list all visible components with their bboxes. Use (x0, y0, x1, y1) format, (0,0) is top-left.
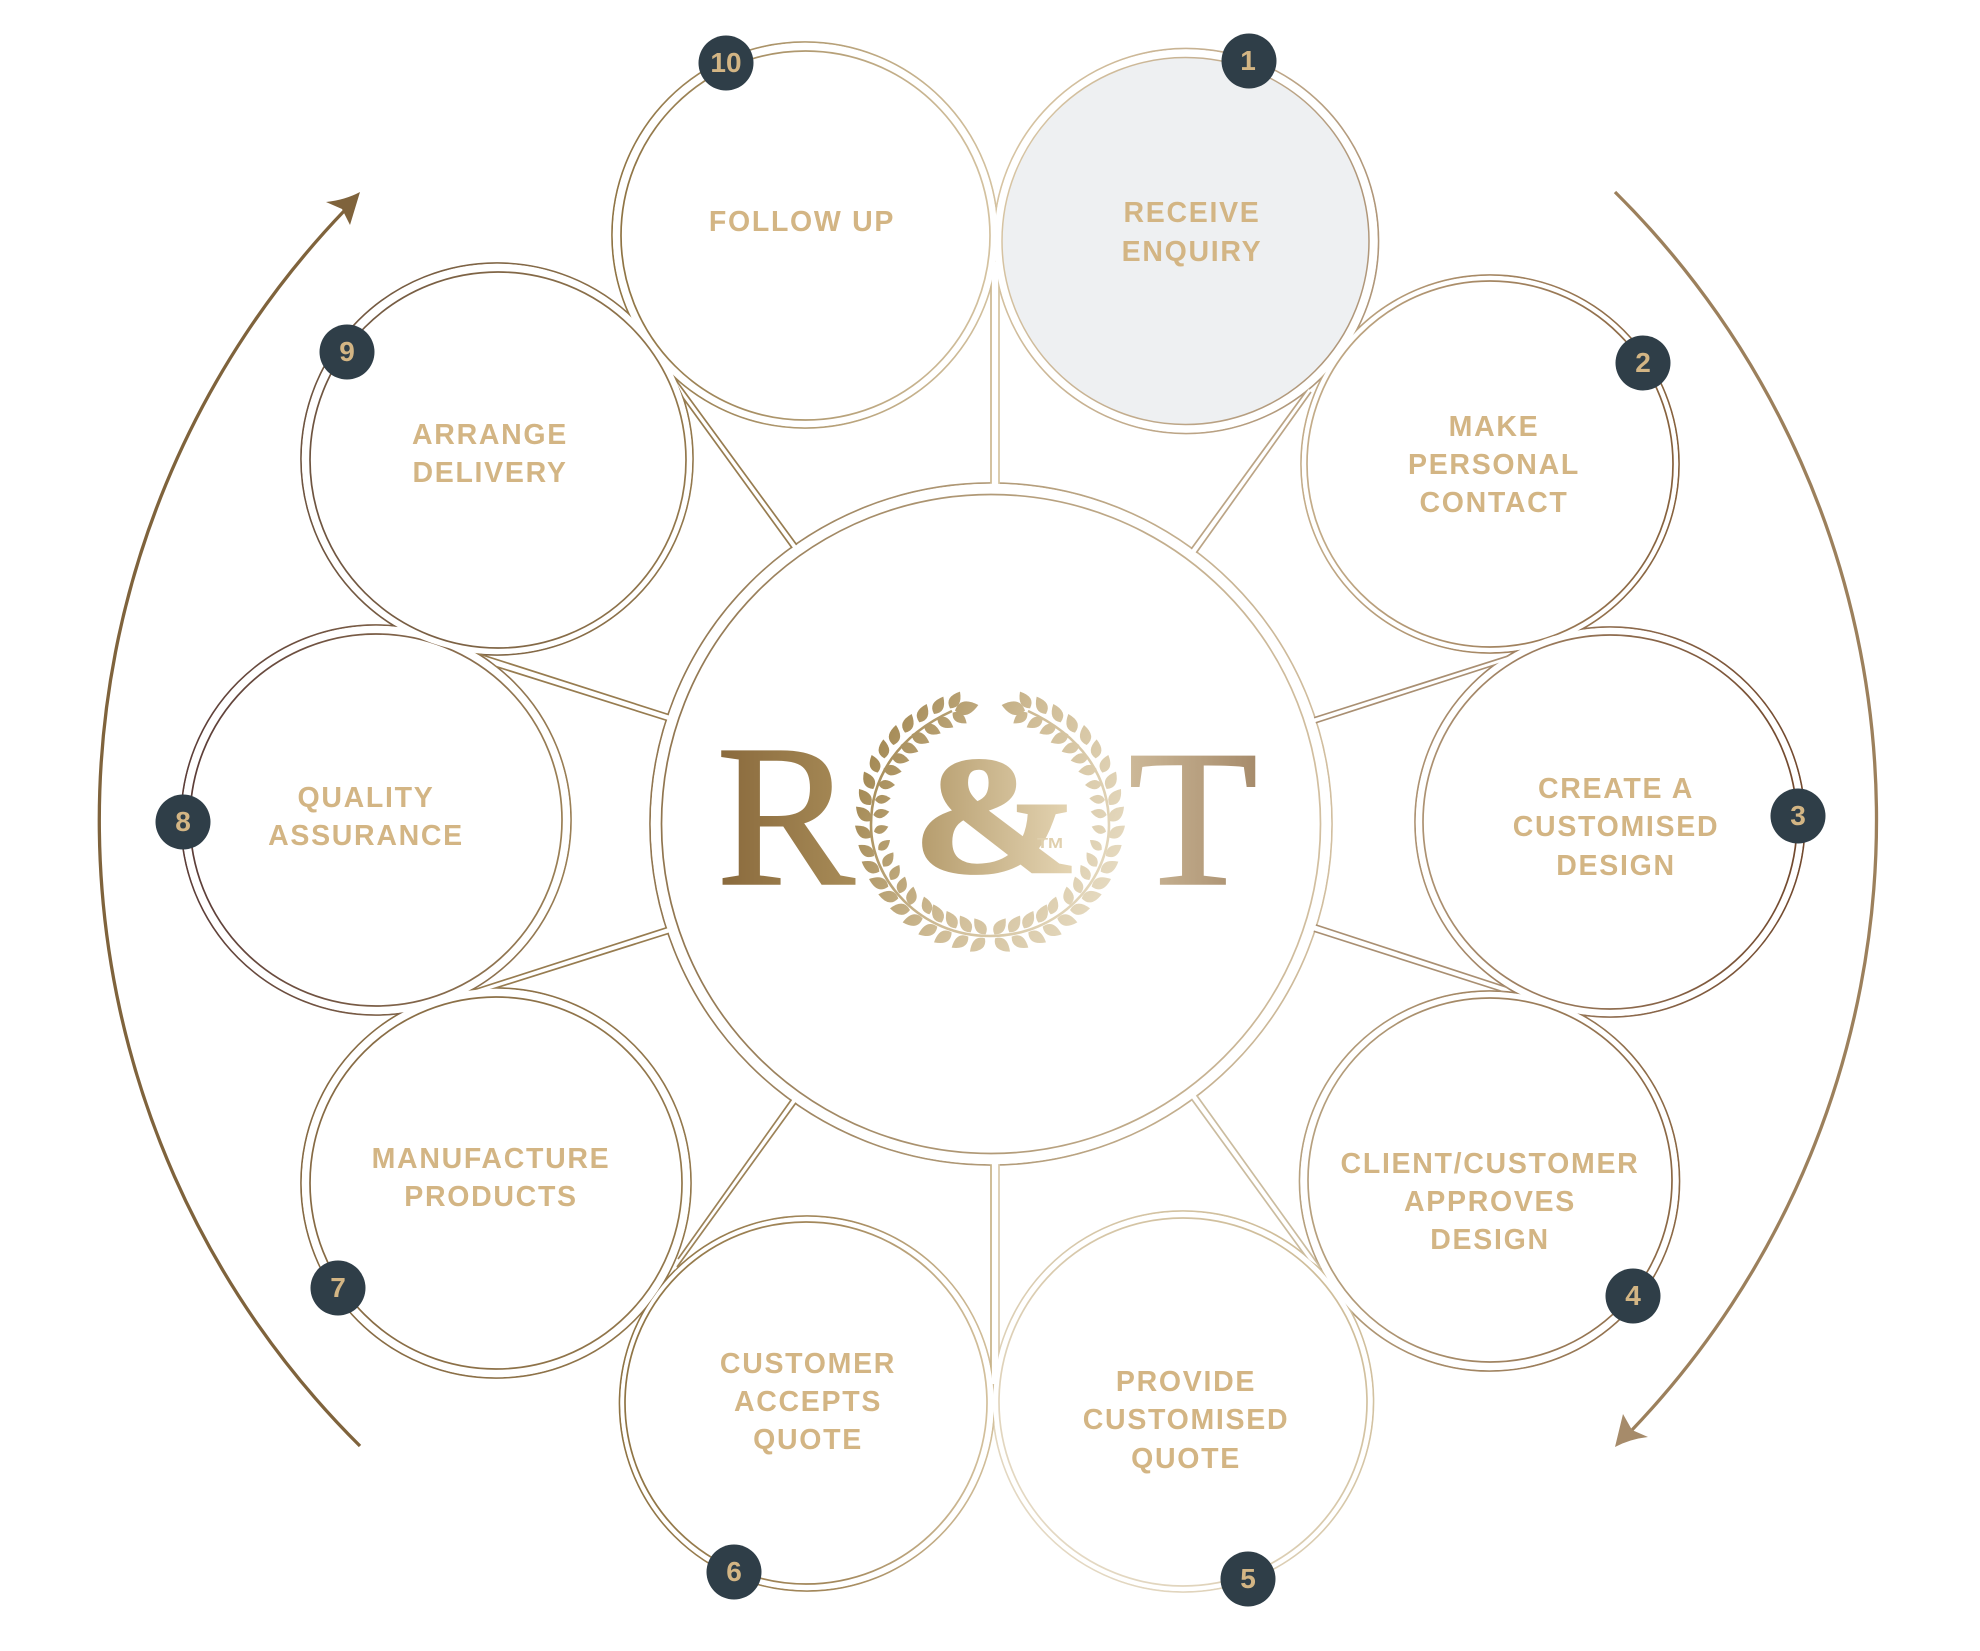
step 4: client approves design: CLIENT/CUSTOMER (1341, 1148, 1639, 1180)
central circle (651, 484, 1331, 1164)
step 3: create a customised design (1416, 628, 1826, 1016)
step 10: follow up: 10 (710, 47, 742, 78)
step 10: follow up: FOLLOW UP (709, 206, 895, 238)
step 3: create a customised design: CREATE A (1538, 773, 1694, 805)
step 7: manufacture products (302, 989, 690, 1377)
step 4: client approves design: 4 (1625, 1280, 1641, 1311)
logo ampersand: & (912, 723, 1080, 909)
step 1: receive enquiry: 1 (1240, 45, 1256, 76)
step 8: quality assurance: 8 (175, 806, 191, 837)
outer ring outlines of all circles (181, 42, 1805, 1592)
step 3: create a customised design: 3 (1790, 800, 1806, 831)
step 1: receive enquiry (994, 34, 1378, 433)
step 5: provide customised quote: CUSTOMISED (1083, 1404, 1289, 1436)
arrow: clockwise flow left side (99, 192, 360, 1446)
step 3: create a customised design: CUSTOMISED (1513, 811, 1719, 843)
step 8: quality assurance: ASSURANCE (268, 820, 464, 852)
step 9: arrange delivery: 9 (339, 336, 355, 367)
logo letter T: T (1128, 711, 1258, 927)
connectors between the centre ring and outer circles (461, 270, 1530, 1384)
step 5: provide customised quote: PROVIDE (1116, 1366, 1256, 1398)
logo: R&T with laurel wreath (716, 680, 1258, 965)
step 7: manufacture products: 7 (330, 1272, 346, 1303)
step 5: provide customised quote: 5 (1240, 1563, 1256, 1594)
step 6: customer accepts quote: 6 (726, 1556, 742, 1587)
logo letter R: R (716, 703, 856, 928)
step 4: client approves design (1300, 992, 1679, 1370)
step 5: provide customised quote (993, 1212, 1373, 1606)
step 2: make personal contact (1302, 276, 1678, 652)
step 4: client approves design: APPROVES (1404, 1186, 1576, 1218)
step 6: customer accepts quote: CUSTOMER (720, 1348, 896, 1380)
step 5: provide customised quote: QUOTE (1131, 1443, 1241, 1475)
logo trademark: TM (1037, 835, 1063, 852)
step 2: make personal contact: MAKE (1449, 411, 1539, 443)
step 10: follow up (613, 36, 997, 427)
step 8: quality assurance: QUALITY (298, 782, 434, 814)
step 4: client approves design: DESIGN (1430, 1224, 1550, 1256)
step 9: arrange delivery: DELIVERY (412, 457, 568, 489)
step 2: make personal contact: 2 (1635, 347, 1651, 378)
white channels inside the connectors (472, 262, 1519, 1384)
step 2: make personal contact: CONTACT (1419, 487, 1569, 519)
step 2: make personal contact: PERSONAL (1408, 449, 1580, 481)
step 6: customer accepts quote (620, 1217, 994, 1600)
step 1: receive enquiry: ENQUIRY (1122, 236, 1262, 268)
step 1: receive enquiry: RECEIVE (1123, 197, 1261, 229)
step 6: customer accepts quote: ACCEPTS (734, 1386, 882, 1418)
laurel wreath (855, 692, 1125, 952)
step 8: quality assurance (156, 626, 570, 1014)
step 7: manufacture products: MANUFACTURE (372, 1143, 610, 1175)
step 3: create a customised design: DESIGN (1556, 850, 1676, 882)
step 9: arrange delivery: ARRANGE (412, 419, 568, 451)
step 6: customer accepts quote: QUOTE (753, 1424, 863, 1456)
step 7: manufacture products: PRODUCTS (404, 1181, 578, 1213)
arrow: clockwise flow right side (1615, 192, 1877, 1447)
step 9: arrange delivery (302, 264, 692, 654)
